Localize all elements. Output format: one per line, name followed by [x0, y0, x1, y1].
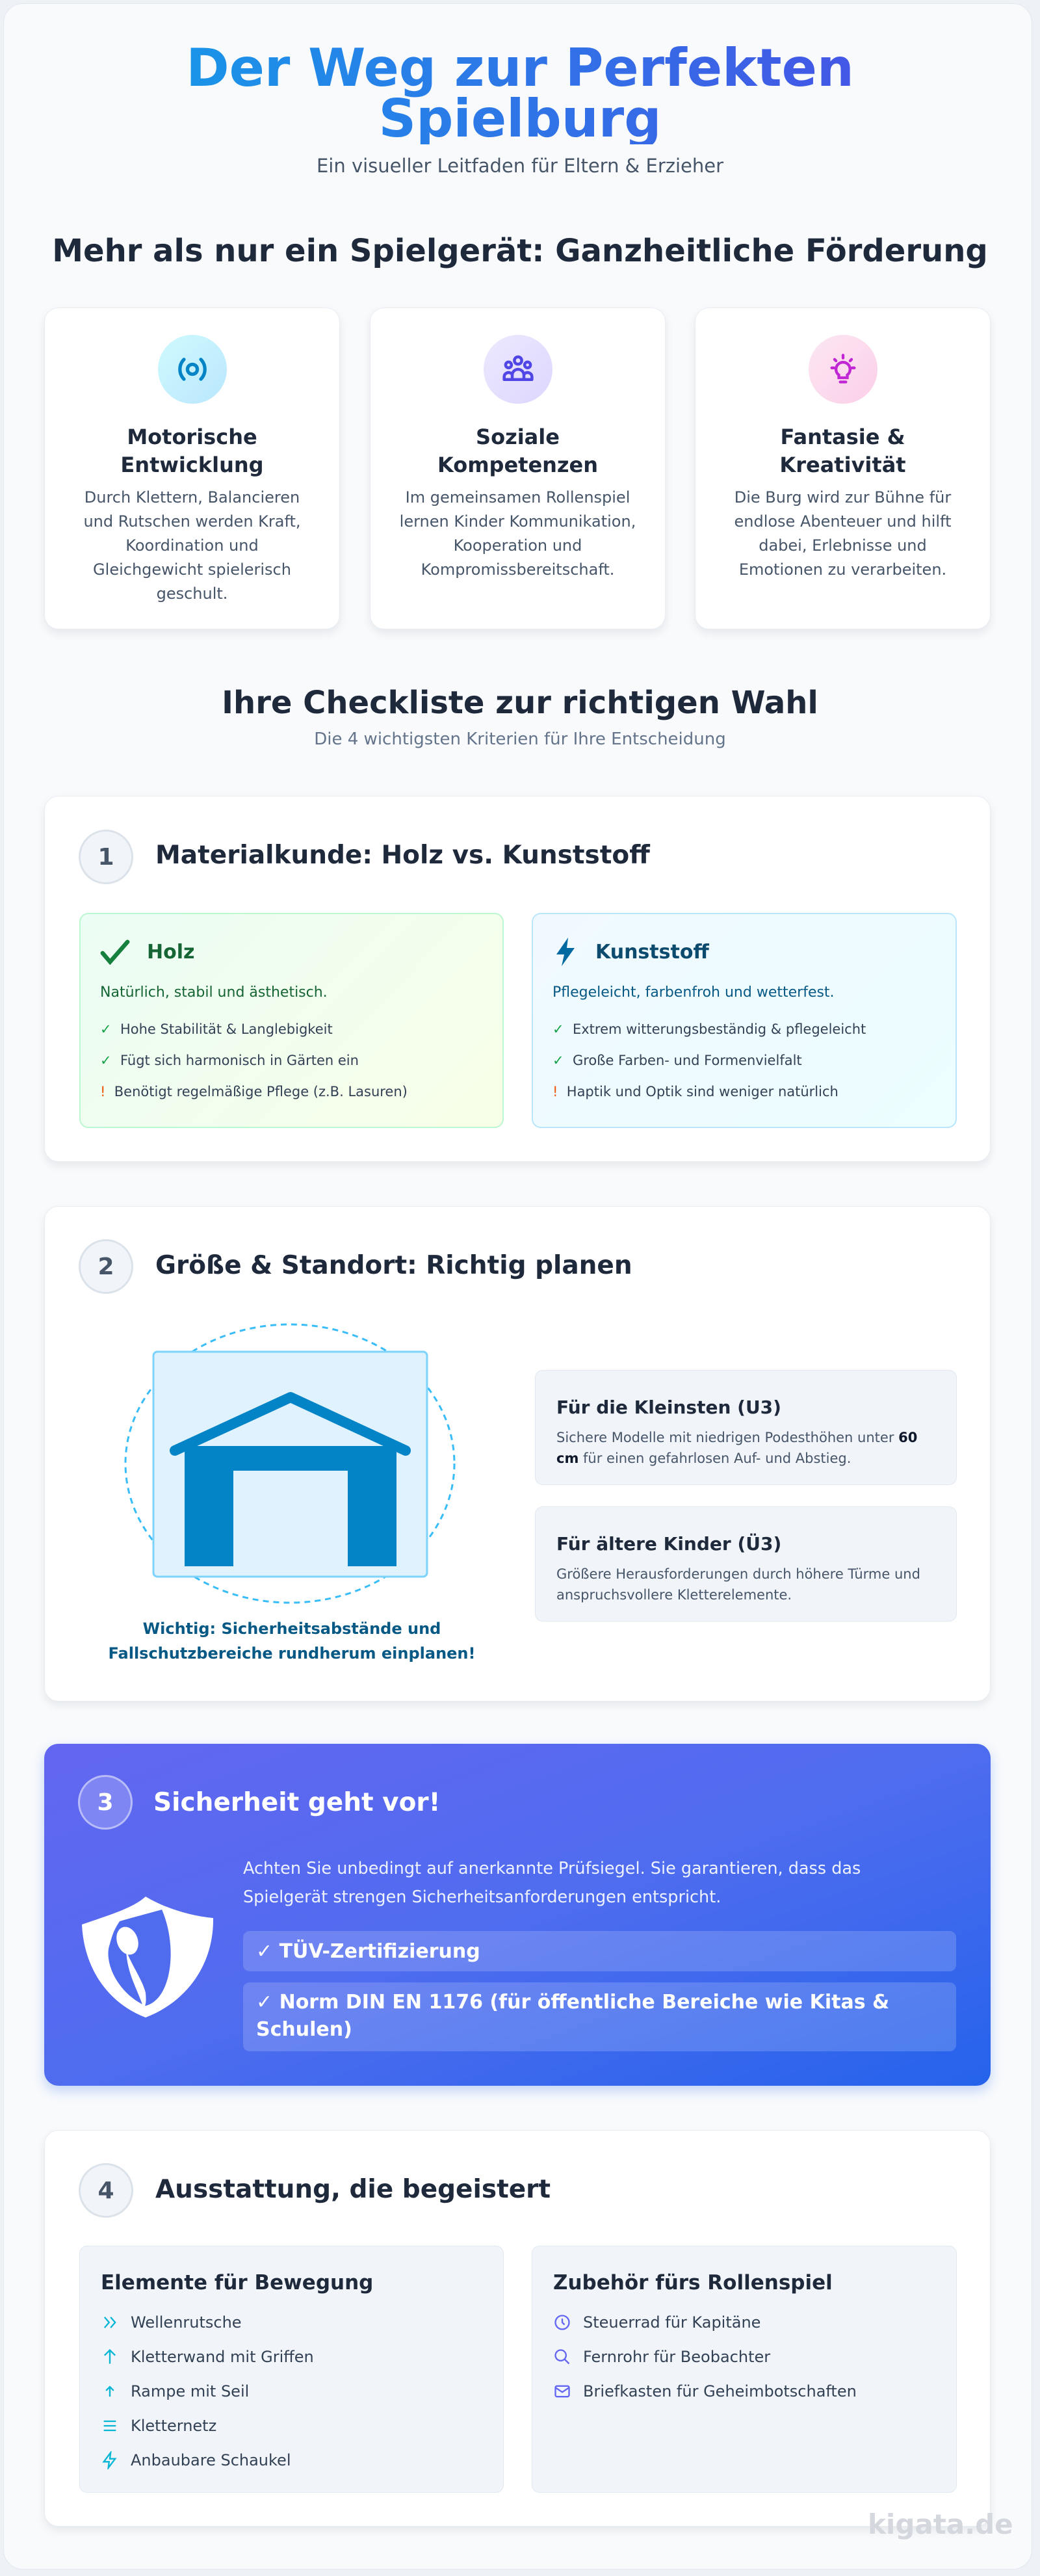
title: Der Weg zur Perfekten — [186, 38, 854, 98]
box: Rollenspiel: Steuerrad für Kapitäne — [583, 2313, 760, 2332]
Kunststoff title: Kunststoff — [595, 940, 709, 964]
title — [0, 43, 1040, 144]
number badge 4: 4 — [98, 2177, 114, 2204]
card title: Fantasie & — [780, 425, 905, 449]
box: Ü3: Für ältere Kinder (Ü3) — [556, 1533, 781, 1555]
section heading: Sicherheit geht vor! — [153, 1788, 440, 1817]
number badge 1 — [79, 830, 133, 884]
box: U3: Für die Kleinsten (U3) — [556, 1397, 781, 1418]
card title — [779, 425, 906, 477]
icon: bulb — [809, 335, 878, 404]
title: Spielburg — [379, 88, 661, 149]
box: Ü3: Größere Herausforderungen durch höhere Türme und anspruchsvollere Kletterelemente. — [556, 1566, 920, 1603]
Kunststoff list — [552, 1021, 866, 1099]
subtitle: Ein visueller Leitfaden für Eltern & Erzieher — [317, 155, 723, 177]
pill: DIN EN 1176 — [243, 1982, 956, 2051]
number badge 2 — [79, 1239, 133, 1294]
card title: Entwicklung — [120, 453, 264, 477]
card title: Soziale — [476, 425, 560, 449]
Holz list: ✓ Fügt sich harmonisch in Gärten ein — [100, 1053, 359, 1068]
Holz title: Holz — [147, 940, 194, 964]
card title: Motorische — [127, 425, 257, 449]
box: Ü3 — [535, 1506, 957, 1622]
card text: Durch Klettern, Balancieren und Rutschen werden Kraft, Koordination und Gleichgewicht spielerisch geschult. — [83, 488, 301, 603]
text: Prüfsiegel: Achten Sie unbedingt auf anerkannte Prüfsiegel. Sie garantieren, dass das Spielgerät strengen Sicherheitsanforderungen entspricht. — [243, 1859, 861, 1907]
number badge 4 — [79, 2163, 133, 2218]
panel: soziale Kompetenzen — [370, 308, 666, 629]
Holz list: ! Benötigt regelmäßige Pflege (z.B. Lasuren) — [100, 1084, 408, 1099]
box: Bewegung: Kletternetz — [131, 2416, 216, 2434]
caption: Wichtig: Fallschutzbereiche rundherum einplanen! — [109, 1644, 475, 1663]
Kunststoff text: Pflegeleicht, farbenfroh und wetterfest. — [552, 984, 835, 1001]
Kunststoff list: ✓ Große Farben- und Formenvielfalt — [552, 1053, 802, 1068]
panel: motorische Entwicklung — [44, 308, 340, 629]
heading: Ganzheitliche Förderung: Mehr als nur ein Spielgerät: Ganzheitliche Förderung — [52, 233, 988, 269]
section heading: Größe & Standort: Richtig planen — [155, 1251, 632, 1280]
panel: 2 Größe & Standort — [44, 1206, 991, 1702]
heading: Checkliste: Ihre Checkliste zur richtigen Wahl — [222, 685, 818, 721]
number badge 1: 1 — [98, 844, 114, 870]
box: Bewegung: Anbaubare Schaukel — [131, 2451, 291, 2469]
card title — [120, 425, 264, 477]
watermark: kigata.de — [868, 2508, 1013, 2540]
box: Rollenspiel: Fernrohr für Beobachter — [583, 2347, 770, 2365]
card title: Kompetenzen — [437, 453, 598, 477]
box: Bewegung: Wellenrutsche — [131, 2313, 242, 2332]
box: Kunststoff — [532, 913, 957, 1128]
panel: 3 Sicherheit — [44, 1744, 991, 2086]
Holz list — [100, 1021, 408, 1099]
Holz title — [100, 940, 194, 965]
subheading: Die 4 wichtigsten Kriterien für Ihre Entscheidung — [314, 729, 726, 749]
icon: shield — [82, 1897, 213, 2017]
card text: Die Burg wird zur Bühne für endlose Abenteuer und hilft dabei, Erlebnisse und Emotionen zu verarbeiten. — [734, 488, 952, 579]
box: Rollenspiel — [532, 2246, 957, 2493]
box: Bewegung: Kletterwand mit Griffen — [131, 2347, 314, 2365]
pill: TÜV: ✓ TÜV-Zertifizierung — [256, 1940, 480, 1963]
box: Rollenspiel: Zubehör fürs Rollenspiel — [553, 2271, 833, 2294]
box: U3 — [535, 1370, 957, 1485]
box: Holz — [79, 913, 504, 1128]
pill: TÜV — [243, 1931, 956, 1971]
caption: Wichtig: Wichtig: Sicherheitsabstände und — [143, 1620, 441, 1638]
card title: Kreativität — [779, 453, 906, 477]
section heading: Ausstattung, die begeistert — [155, 2175, 551, 2204]
box: Bewegung: Rampe mit Seil — [131, 2382, 249, 2400]
box: Rollenspiel: Briefkasten für Geheimbotschaften — [583, 2382, 857, 2400]
section heading: Materialkunde: Holz vs. Kunststoff — [155, 841, 650, 870]
illustration: castle with safety zone — [125, 1324, 455, 1603]
caption: Wichtig — [109, 1620, 475, 1663]
pill: DIN EN 1176: ✓ Norm DIN EN 1176 (für öffentliche Bereiche wie Kitas & Schulen) — [256, 1991, 889, 2041]
Kunststoff list: ✓ Extrem witterungsbeständig & pflegeleicht — [552, 1021, 866, 1037]
Holz text: Natürlich, stabil und ästhetisch. — [100, 984, 328, 1001]
box: Bewegung: Elemente für Bewegung — [101, 2271, 373, 2294]
panel: Fantasie & Kreativität — [695, 308, 991, 629]
number badge 3: 3 — [97, 1789, 114, 1815]
icon: group — [484, 335, 552, 404]
Kunststoff list: ! Haptik und Optik sind weniger natürlich — [552, 1084, 838, 1099]
box: Bewegung — [79, 2246, 504, 2493]
box: U3: Sichere Modelle mit niedrigen Podesthöhen unter 60 cm für einen gefahrlosen Auf- und Abstieg. — [556, 1430, 917, 1466]
Kunststoff title — [556, 938, 710, 966]
card title — [437, 425, 598, 477]
number badge 2: 2 — [98, 1254, 114, 1280]
number badge 3 — [78, 1775, 133, 1830]
card text: Im gemeinsamen Rollenspiel lernen Kinder Kommunikation, Kooperation und Kompromissbereitschaft. — [400, 488, 636, 579]
panel: 1 Materialkunde — [44, 796, 991, 1162]
panel: 4 Ausstattung — [44, 2130, 991, 2527]
icon: motion — [157, 335, 226, 404]
Holz list: ✓ Hohe Stabilität & Langlebigkeit — [100, 1021, 333, 1037]
